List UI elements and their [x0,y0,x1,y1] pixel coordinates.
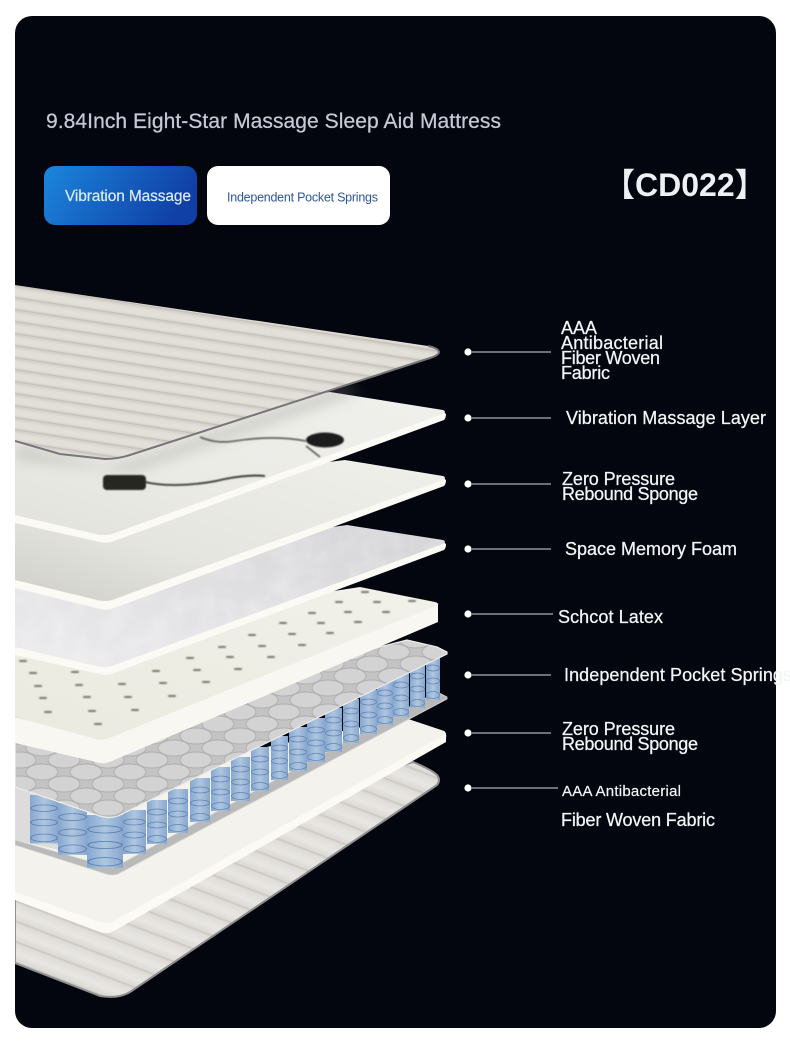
layer: top antibacterial fabric [15,285,439,459]
layer: space memory foam [15,525,446,675]
badge: Vibration Massage [44,166,197,225]
label: AAA Antibacterial Fiber Woven Fabric (lower) [561,783,715,830]
latex pinholes [20,592,415,724]
callout line 6 [464,671,551,679]
label: AAA Antibacterial Fiber Woven Fabric [561,318,663,383]
label: Zero Pressure Rebound Sponge (lower): Rebound Sponge [562,734,698,754]
label: Zero Pressure Rebound Sponge (lower): Zero Pressure [562,719,675,739]
fabric shadow [15,385,360,472]
callout line 5 [464,610,553,618]
label: Vibration Massage Layer: Vibration Massage Layer [566,408,766,428]
label: Independent Pocket Springs: Independent Pocket Springs [564,665,790,685]
upper spring plate [15,640,447,818]
label: Schcot Latex: Schcot Latex [558,607,663,627]
layer: independent pocket springs [15,640,447,875]
spring back fill [15,788,60,850]
badge: Independent Pocket Springs: Independent Pocket Springs [227,190,378,204]
label: Zero Pressure Rebound Sponge (lower) [562,719,698,754]
layer: upper zero pressure sponge [15,460,446,610]
badge: Independent Pocket Springs [207,166,390,225]
label: AAA Antibacterial Fiber Woven Fabric (lower): AAA Antibacterial [562,783,681,800]
callout line 1 [464,348,551,356]
layer: vibration massage [15,385,446,543]
label: AAA Antibacterial Fiber Woven Fabric (lower): Fiber Woven Fabric [561,810,715,830]
model number: 【CD022】 [603,167,767,203]
label: AAA Antibacterial Fiber Woven Fabric: Antibacterial [561,333,663,353]
vibration motor: left with cable [103,475,265,490]
label: AAA Antibacterial Fiber Woven Fabric: Fabric [561,363,610,383]
title: 9.84Inch Eight-Star Massage Sleep Aid Mattress [46,110,501,133]
spring columns [30,656,440,868]
layer: schcot latex [15,587,438,763]
label: Zero Pressure Rebound Sponge: Rebound Sponge [562,484,698,504]
callout line 2 [464,414,551,422]
label: Zero Pressure Rebound Sponge: Zero Pressure [562,469,675,489]
label: Zero Pressure Rebound Sponge [562,469,698,504]
badge: Vibration Massage: Vibration Massage [65,188,191,205]
exploded mattress illustration [15,285,447,997]
callout line 4 [464,545,551,553]
callout line 8 [464,784,558,792]
vibration motor: right with cable [200,432,344,457]
callout line 3 [464,480,551,488]
layer: lower zero pressure sponge [15,718,446,933]
lower spring plate [15,692,447,875]
label: AAA Antibacterial Fiber Woven Fabric: AAA [561,318,597,338]
label: Space Memory Foam: Space Memory Foam [565,539,737,559]
fabric rim [15,346,439,459]
callout line 7 [464,729,551,737]
label: AAA Antibacterial Fiber Woven Fabric: Fiber Woven [561,348,660,368]
layer: bottom fabric [15,762,439,997]
